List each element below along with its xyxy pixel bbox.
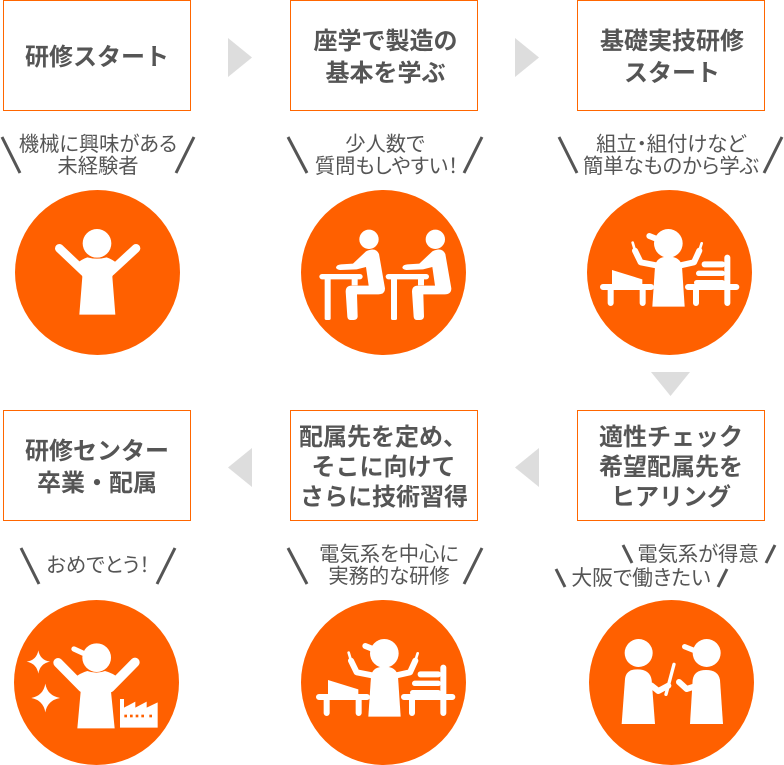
step 6 heading box [4, 410, 190, 520]
step 5 heading box [290, 410, 478, 520]
arrow: step 5 to 6 [228, 448, 252, 487]
caption: step 3: 簡単なものから学ぶ [583, 149, 759, 179]
icon: celebrating graduate with sparkles and factory [14, 600, 179, 765]
step 2 heading box: 基本を学ぶ [326, 53, 446, 88]
caption: step 2: 質問もしやすい！ [315, 149, 458, 179]
caption: step 6 [21, 548, 175, 584]
caption: step 1: 未経験者 [57, 149, 139, 179]
step 4 heading box [578, 410, 764, 520]
arrow: step 4 to 5 [515, 448, 539, 487]
caption: step 4: 電気系が得意 [637, 537, 759, 567]
caption: step 3: 組立・組付けなど [596, 127, 747, 157]
caption: step 6: おめでとう！ [46, 548, 150, 578]
step 3 heading box: スタート [624, 53, 720, 88]
step 3 heading box: 基礎実技研修 [600, 21, 744, 56]
caption: step 1 [2, 127, 194, 179]
step 3 heading box [578, 0, 764, 110]
arrow: step 2 to 3 [515, 38, 539, 77]
step 6 heading box: 研修センター [25, 431, 169, 466]
step 4 heading box: 希望配属先を [599, 447, 743, 482]
icon: interview between two people [589, 600, 754, 765]
icon: person with raised arms [15, 190, 180, 355]
caption: step 2 [288, 127, 482, 179]
icon: two students at desks [301, 190, 466, 355]
step 1 heading box: 研修スタート [25, 37, 169, 72]
icon: trainee at workbench, electrical training [301, 600, 466, 765]
step 4 heading box: 適性チェック [599, 417, 743, 452]
step 2 heading box: 座学で製造の [314, 21, 458, 56]
step 4 heading box: ヒアリング [611, 477, 731, 512]
caption: step 1: 機械に興味がある [19, 127, 177, 157]
step 5 heading box: 配属先を定め、 [299, 417, 467, 452]
caption: step 2: 少人数で [345, 127, 425, 157]
step 6 heading box: 卒業・配属 [37, 463, 157, 498]
caption: step 4: 大阪で働きたい [571, 561, 711, 591]
caption: step 5: 電気系を中心に [319, 537, 459, 567]
step 5 heading box: そこに向けて [312, 447, 456, 482]
step 1 heading box [4, 0, 190, 110]
caption: step 4 [556, 537, 775, 591]
arrow: step 1 to 2 [228, 38, 252, 77]
step 5 heading box: さらに技術習得 [300, 477, 468, 512]
caption: step 5 [288, 537, 482, 589]
caption: step 5: 実務的な研修 [328, 559, 450, 589]
arrow: step 3 down to 4 [651, 372, 690, 396]
caption: step 3 [559, 127, 782, 179]
step 2 heading box [290, 0, 478, 110]
icon: trainee assembling at workbench [587, 190, 752, 355]
